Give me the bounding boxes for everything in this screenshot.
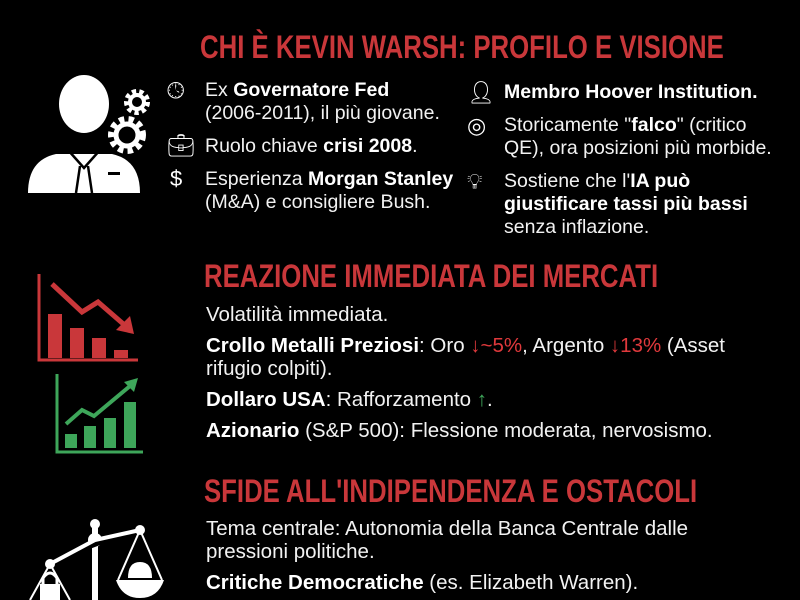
- icon: scales: [29, 519, 164, 600]
- icon: briefcase: 💼︎: [167, 133, 195, 158]
- icon: bulb: 💡︎: [467, 169, 482, 194]
- text block: profilo right: QE), ora posizioni più morbide.: [504, 137, 772, 159]
- text block: mercati: Dollaro USA: Rafforzamento ↑.: [206, 388, 493, 411]
- text block: profilo right: giustificare tassi più bassi: [504, 193, 748, 215]
- text block: profilo right: Storicamente "falco" (critico: [504, 114, 747, 136]
- text block: sfide: pressioni politiche.: [206, 540, 375, 563]
- text block: profilo right: Membro Hoover Institution.: [504, 81, 758, 103]
- title: mercati: REAZIONE IMMEDIATA DEI MERCATI: [204, 258, 658, 294]
- title: profilo: CHI È KEVIN WARSH: PROFILO E VISIONE: [200, 29, 724, 65]
- text block: profilo right: senza inflazione.: [504, 216, 649, 238]
- icon: falling chart: [38, 274, 138, 362]
- icon: person: 👤︎: [467, 80, 495, 105]
- title: sfide: SFIDE ALL'INDIPENDENZA E OSTACOLI: [204, 473, 697, 509]
- icon: money hand: $: [170, 166, 182, 191]
- icon: clock: 🕓︎: [167, 78, 184, 103]
- text block: mercati: Volatilità immediata.: [206, 303, 388, 326]
- text block: profilo right: [504, 81, 772, 238]
- text block: mercati: [206, 303, 725, 442]
- text block: profilo left: Ex Governatore Fed: [205, 79, 389, 101]
- text block: mercati: Azionario (S&P 500): Flessione moderata, nervosismo.: [206, 419, 713, 442]
- text block: mercati: Crollo Metalli Preziosi: Oro ↓~5%, Argento ↓13% (Asset: [206, 334, 725, 357]
- icon: target: ◎: [467, 113, 486, 138]
- icon: rising chart: [56, 374, 143, 454]
- text block: profilo left: (2006-2011), il più giovane.: [205, 102, 440, 124]
- text block: mercati: rifugio colpiti).: [206, 357, 332, 380]
- icon: businessman with gears: [28, 75, 150, 193]
- text block: sfide: Tema centrale: Autonomia della Banca Centrale dalle: [206, 517, 688, 540]
- text block: profilo left: Ruolo chiave crisi 2008.: [205, 135, 418, 157]
- text block: sfide: [206, 517, 688, 594]
- text block: sfide: Critiche Democratiche (es. Elizabeth Warren).: [206, 571, 638, 594]
- text block: profilo right: Sostiene che l'IA può: [504, 170, 690, 192]
- text block: profilo left: (M&A) e consigliere Bush.: [205, 191, 430, 213]
- text block: profilo left: [205, 79, 454, 213]
- text block: profilo left: Esperienza Morgan Stanley: [205, 168, 453, 190]
